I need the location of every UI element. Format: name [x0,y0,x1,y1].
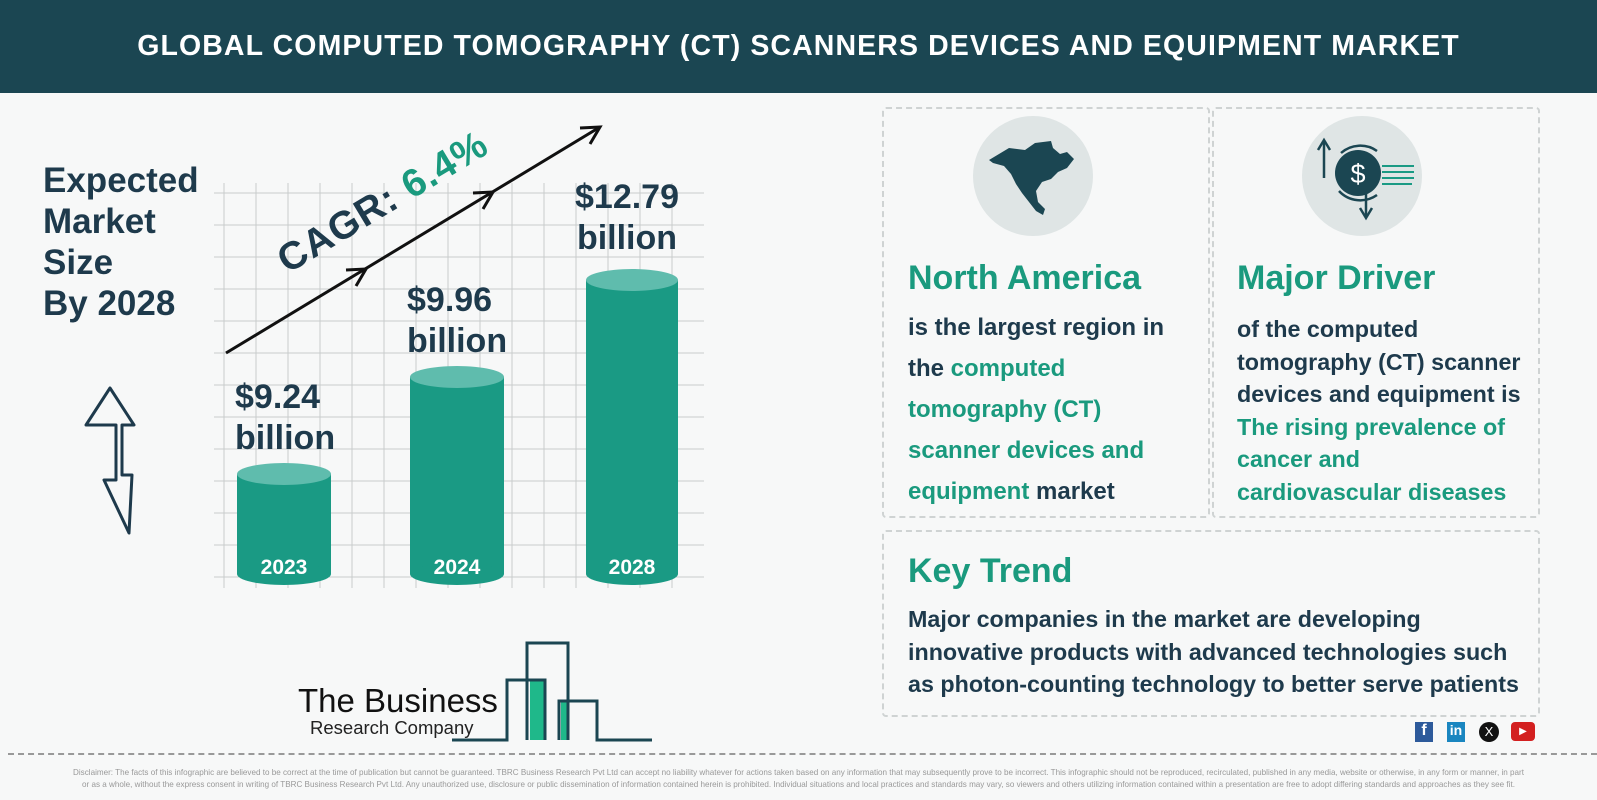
logo: Research Company [310,717,474,738]
text [1237,316,1521,504]
heading: Key Trend [908,552,1072,590]
value labels: billion [235,419,335,457]
value labels: $9.24 [235,378,320,416]
heading: expected market size: Size [43,243,113,282]
social icons: X [1485,724,1493,739]
social icons: f [1421,722,1427,739]
text: of the computed [1237,316,1418,342]
bar chart [214,183,704,588]
panel: key trend [882,530,1540,717]
text: cardiovascular diseases [1237,478,1506,504]
header [0,0,1597,93]
arrow: growth [225,125,603,354]
social icons: ▶ [1519,726,1527,737]
text: as photon-counting technology to better serve patients [908,671,1519,697]
text: the computed [908,355,1065,382]
icon: north america map [973,116,1093,236]
text: $9.96 [407,281,492,319]
text: devices and equipment is [1237,381,1521,407]
social icons: in [1450,722,1462,738]
value labels [235,378,335,457]
text: tomography (CT) scanner [1237,348,1520,374]
heading: Major Driver [1237,259,1435,297]
bar 2023: 2023 [261,556,307,579]
disclaimer: or as a whole, without the express consent in writing of TBRC Business Research Pvt Ltd. Any unauthorized use, disclosure or public dissemination of information contained herein is prohibited. Individual situations and local practices and standards may vary, so viewers and others utilizing information contained within a presentation are free to adopt differing standards and approaches as they see fit. [82,780,1515,789]
text [908,606,1519,697]
disclaimer [73,768,1524,789]
icon: dollar: $ [1350,159,1366,189]
bar 2024 [410,366,504,585]
text: innovative products with advanced technologies such [908,638,1507,664]
header: GLOBAL COMPUTED TOMOGRAPHY (CT) SCANNERS DEVICES AND EQUIPMENT MARKET [137,30,1460,62]
text: scanner devices and [908,437,1144,464]
icon: dollar [1302,116,1422,236]
bar 2028 [586,269,678,585]
text: $12.79 [575,178,679,216]
bar 2023 [237,463,331,585]
panel: north america [882,107,1210,518]
bar 2028: 2028 [609,556,656,579]
text: billion [577,219,677,257]
text: billion [407,322,507,360]
heading: expected market size: Market [43,202,156,241]
text: tomography (CT) [908,396,1101,423]
text: The rising prevalence of [1237,414,1505,440]
text: cancer and [1237,446,1360,472]
logo [298,642,652,742]
heading: expected market size: By 2028 [43,284,175,323]
heading: expected market size: Expected [43,161,199,200]
text: equipment market [908,478,1115,505]
social icons [1415,722,1535,742]
heading: North America [908,259,1141,297]
text: is the largest region in [908,314,1164,341]
icon: up arrow [84,386,136,534]
divider [8,753,1597,755]
CAGR label: CAGR: 6.4% [270,123,496,282]
text [908,314,1164,505]
text: Major companies in the market are developing [908,606,1421,632]
logo: The Business [298,682,498,719]
heading: expected market size [43,161,199,323]
bar 2024: 2024 [434,556,481,579]
panel: major driver [1212,107,1540,518]
disclaimer: Disclaimer: The facts of this infographic are believed to be correct at the time of publication but cannot be guaranteed. TBRC Business Research Pvt Ltd can accept no liability whatever for actions taken based on any information that may subsequently prove to be incorrect. This infographic should not be reproduced, recirculated, published in any media, website or otherwise, in any form or manner, in part [73,768,1524,777]
